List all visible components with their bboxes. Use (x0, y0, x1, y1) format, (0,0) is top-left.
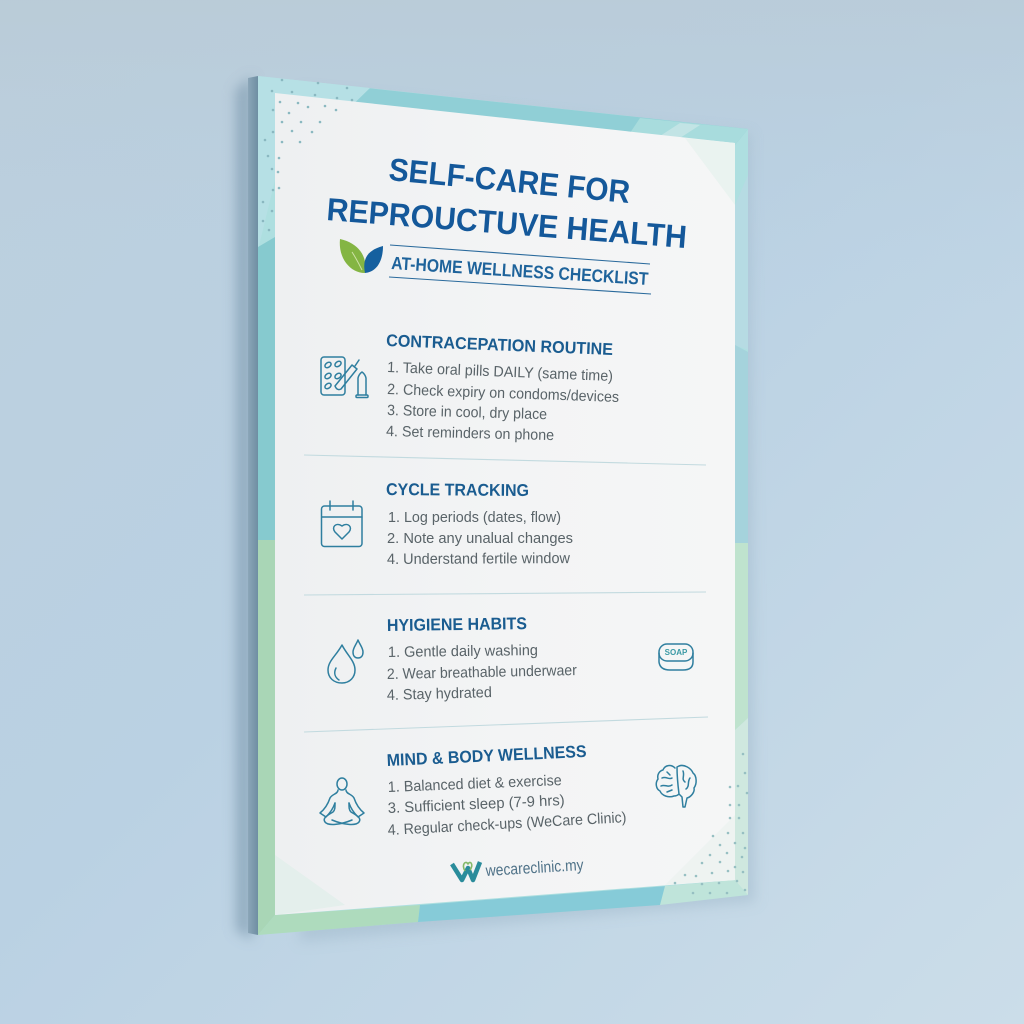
checklist (387, 509, 573, 568)
checklist (386, 359, 619, 444)
dots: bottom-right corner (674, 753, 748, 894)
heading: CYCLE TRACKING (386, 480, 529, 500)
icon: calendar with heart (322, 501, 362, 546)
footer: clinic logo and website (452, 857, 584, 880)
checklist: 4. Regular check-ups (WeCare Clinic) (387, 809, 627, 839)
checklist: 1. Gentle daily washing (388, 642, 538, 661)
section: contraception routine (321, 331, 619, 444)
panel corner tints (275, 138, 735, 915)
checklist: 3. Store in cool, dry place (387, 402, 547, 423)
title (325, 151, 688, 255)
section: cycle tracking (322, 480, 573, 568)
dots: top-left corner (262, 79, 353, 231)
checklist: 1. Balanced diet & exercise (387, 772, 562, 796)
icon: soap bar: SOAP (665, 648, 688, 657)
icon: brain (656, 765, 696, 807)
checklist: 4. Stay hydrated (387, 684, 492, 704)
icon: leaves (340, 239, 383, 273)
heading: HYIGIENE HABITS (387, 614, 527, 635)
icon: meditating figure (320, 778, 364, 824)
checklist (387, 772, 627, 839)
white content panel (275, 93, 735, 915)
section: hygiene habits (328, 614, 693, 704)
checklist: 2. Check expiry on condoms/devices (387, 381, 619, 406)
subtitle banner: AT-HOME WELLNESS CHECKLIST (391, 253, 649, 289)
icon: WeCare logo (452, 862, 480, 880)
heading: MIND & BODY WELLNESS (386, 742, 587, 770)
heading: CONTRACEPATION ROUTINE (386, 331, 613, 359)
checklist: 4. Set reminders on phone (386, 423, 554, 444)
icon: soap bar (659, 644, 693, 670)
website: wecareclinic.my (484, 857, 584, 880)
poster border frame (258, 76, 748, 935)
poster left edge (248, 76, 258, 935)
poster cast shadow (236, 76, 755, 942)
title: REPROUCTUVE HEALTH (325, 191, 688, 255)
checklist: 2. Wear breathable underwaer (387, 662, 577, 683)
section: mind and body wellness (320, 742, 696, 839)
checklist (387, 642, 577, 704)
checklist: 3. Sufficient sleep (7-9 hrs) (387, 792, 565, 817)
checklist: 2. Note any unalual changes (387, 530, 573, 547)
icon: water drops (328, 640, 363, 683)
title: SELF-CARE FOR (387, 151, 632, 210)
checklist: 1. Log periods (dates, flow) (388, 509, 561, 526)
icon: pill pack, syringe and condom (321, 357, 368, 398)
checklist: 4. Understand fertile window (387, 550, 570, 568)
checklist: 1. Take oral pills DAILY (same time) (387, 359, 613, 385)
poster (248, 76, 748, 935)
